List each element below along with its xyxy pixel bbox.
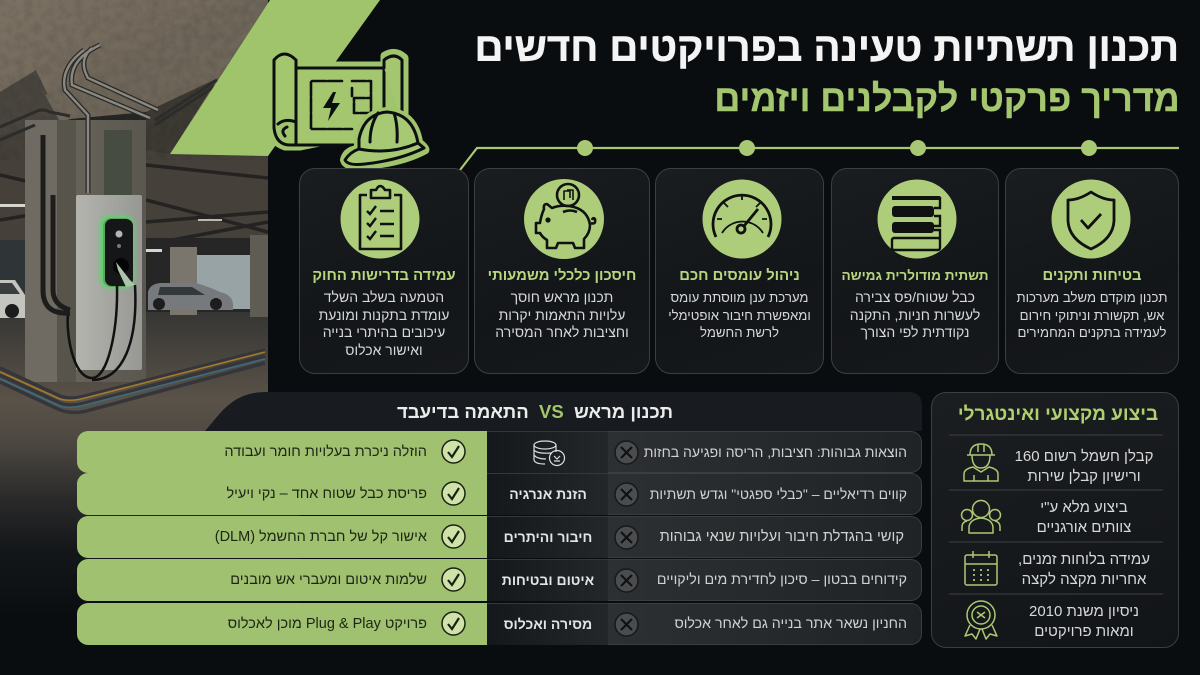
panel: comparison [205,392,922,431]
benefit 1 [77,431,487,473]
icon: calendar [965,551,997,585]
body text: נקודתית לפי הצורך [861,324,969,340]
drawback 1 [608,431,922,473]
item: schedule [1018,551,1150,588]
icon: busbar racks [878,180,956,258]
charger pedestal [76,195,142,370]
body text: הטמעה בשלב השלד [324,289,444,305]
benefit 4 [77,559,487,601]
drawback 4 [608,559,922,601]
body text: לעשרות חניות, התקנה [850,307,980,323]
subtitle: מדריך פרקטי לקבלנים ויזמים [715,78,1180,119]
card: economic savings [474,168,650,374]
body text: תכנון מוקדם משלב מערכות [1016,290,1168,305]
item: licensed contractor [1015,448,1153,485]
item: in-house teams: ביצוע מלא ע"י [1040,499,1128,516]
category icon: coins [487,431,608,473]
category 4: איטום ובטיחות [502,572,594,588]
benefit 1: הוזלה ניכרת בעלויות חומר ועבודה [224,444,427,460]
category 5 [487,603,608,645]
body text [495,289,629,340]
benefit 3 [77,516,487,558]
icon: team [962,500,1000,533]
body text: וחציבות לאחר המסירה [495,324,629,340]
item: experience [1029,603,1139,640]
heading: חיסכון כלכלי משמעותי [488,268,636,284]
row 5 [77,603,922,645]
drawback 5: החניון נשאר אתר בנייה גם לאחר אכלוס [674,616,907,632]
item: experience: ניסיון משנת 2010 [1029,603,1139,620]
charging cable [68,285,135,380]
body text [1016,290,1168,340]
heading: עמידה בדרישות החוק [312,268,456,284]
body text: ומאפשרת חיבור אופטימלי [668,308,811,323]
body text: עומדת בתקנות ומונעת [319,307,449,323]
conduits [104,130,132,196]
distant pillars [170,247,197,315]
row 4 [77,559,922,601]
card: safety and standards [1005,168,1179,374]
card: legal compliance [299,168,469,374]
body text: תכנון מראש חוסך [511,289,613,305]
icon: shield [1052,180,1130,258]
body text [668,290,811,340]
panel icons and dividers [949,434,1163,640]
photo: EV charger in underground parking [0,0,300,562]
green diagonal band [170,0,380,156]
body text [319,289,449,358]
category 2: הזנת אנרגיה [509,486,587,502]
body text: לעמידה בתקנים המחמירים [1017,325,1167,340]
floor conduits [0,350,265,412]
category 5: מסירה ואכלוס [504,616,592,632]
drawback 3: קושי בהגדלת חיבור ועלויות שנאי גבוהות [660,529,904,545]
icon: blueprint and hard hat [272,48,430,168]
body text: עלויות התאמות יקרות [499,307,625,323]
benefit 5: פרויקט Plug & Play מוכן לאכלוס [228,616,427,632]
item: licensed contractor: ורישיון קבלן שירות [1027,468,1141,485]
card: smart load management [655,168,824,374]
dark right background [268,0,1200,420]
icon: award [965,601,997,639]
main pillar [25,120,146,382]
panel: professional execution [931,392,1179,648]
body text: לרשת החשמל [700,325,779,340]
benefit 5 [77,603,487,645]
item: licensed contractor: קבלן חשמל רשום 160 [1015,448,1153,465]
cars [148,283,233,310]
icon: gauge [702,180,782,258]
benefit 4: שלמות איטום ומעברי אש מובנים [230,572,427,588]
comparison heading: תכנון מראש VS התאמה בדיעבד [397,401,673,422]
category 3 [487,516,608,558]
item: schedule: אחריות מקצה לקצה [1022,571,1146,588]
row 1 [77,431,922,473]
item: experience: ומאות פרויקטים [1034,623,1134,640]
floor [0,312,268,400]
drawback 5 [608,603,922,645]
category 2 [487,473,608,515]
card: modular infrastructure [831,168,999,374]
drawback 1: הוצאות גבוהות: חציבות, הריסה ופגיעה בחזות [644,444,907,460]
body text [850,289,980,340]
icon: worker [964,444,998,481]
charger body [100,216,134,288]
icon: clipboard [340,180,420,258]
row 3 [77,516,922,558]
panel heading: ביצוע מקצועי ואינטגרלי [958,404,1158,425]
ceiling far zone [0,120,268,250]
benefit 3: אישור קל של חברת החשמל (DLM) [215,529,427,545]
benefit 2 [77,473,487,515]
item: in-house teams: צוותים אורגניים [1037,519,1131,536]
icon: piggy bank [524,179,604,259]
title: תכנון תשתיות טעינה בפרויקטים חדשים [474,26,1179,70]
heading: ניהול עומסים חכם [679,268,800,284]
drawback 3 [608,516,922,558]
body text: כבל שטוח/פס צבירה [855,289,975,305]
drawback 2: קווים רדיאליים – "כבלי ספגטי" וגדש תשתיות [650,486,907,502]
body text: עיכובים בהיתרי בנייה [323,324,445,340]
concrete ceiling [0,0,270,154]
item: in-house teams [1037,499,1131,536]
body text: אש, תקשורת וניתוקי חירום [1020,308,1164,323]
benefit 2: פריסת כבל שטוח אחד – נקי ויעיל [226,486,427,502]
category 3: חיבור והיתרים [504,529,592,545]
row 2 [77,473,922,515]
category 4 [487,559,608,601]
body text: ואישור אכלוס [345,342,423,358]
timeline with dots [459,140,1179,170]
drawback 4: קידוחים בבטון – סיכון לחדירת מים וליקויים [657,572,907,588]
item: schedule: עמידה בלוחות זמנים, [1018,551,1150,568]
heading: בטיחות ותקנים [1042,268,1142,284]
heading: תשתית מודולרית גמישה [841,268,989,283]
body text: מערכת ענן מווסתת עומס [670,290,808,305]
drawback 2 [608,473,922,515]
